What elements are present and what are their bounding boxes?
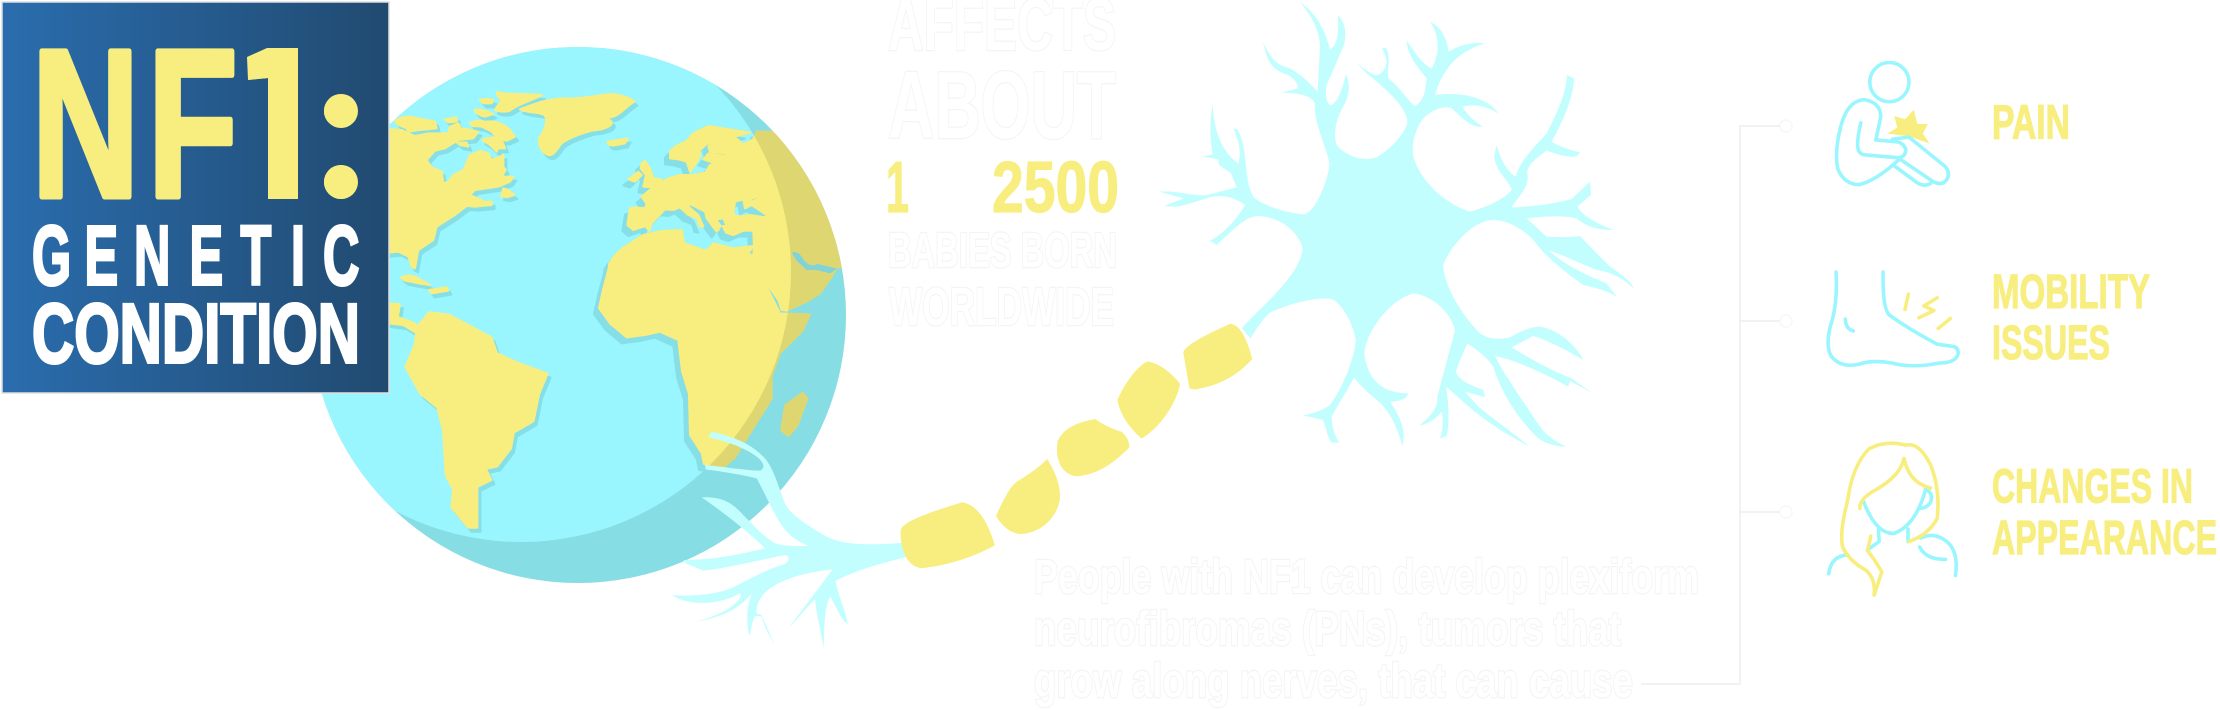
stat line: babies born: BABIES BORN [888, 224, 1117, 278]
title: NF1: : [303, 6, 373, 242]
stat: 1 in 2500: 1 [886, 148, 909, 228]
stat: 1 in 2500 [886, 148, 1119, 228]
connector lines [1641, 120, 1792, 684]
title: NF1 [39, 48, 358, 200]
title panel [2, 2, 389, 393]
axon terminal branches [672, 432, 913, 648]
subtitle: condition: CONDITION [32, 286, 360, 380]
label: pain: PAIN [1992, 96, 2070, 150]
description paragraph: neurofibromas (PNs), tumors that [1034, 603, 1621, 656]
continents [359, 92, 857, 532]
label: mobility issues [1992, 266, 2150, 370]
label: mobility issues: MOBILITY [1992, 266, 2150, 319]
neuron body and dendrites [1159, 2, 1634, 447]
stat: 1 in 2500: IN [923, 148, 978, 228]
subtitle: genetic: GENETIC [32, 208, 359, 303]
globe ocean shadow [310, 47, 846, 583]
stat: 1 in 2500: 2500 [992, 148, 1119, 228]
icon: person in pain [1837, 62, 1948, 185]
icon: injured foot [1828, 272, 1958, 366]
title: NF1: F [148, 6, 238, 242]
label: changes in appearance [1992, 460, 2217, 565]
neuron [901, 2, 1634, 568]
description paragraph: grow along nerves, that can cause [1034, 655, 1633, 708]
title: NF1: 1 [244, 6, 300, 242]
description paragraph: People with NF1 can develop plexiform [1034, 551, 1699, 604]
icon: woman with long hair [1829, 443, 1956, 595]
stat line: worldwide: WORLDWIDE [889, 277, 1114, 337]
globe lit ocean [322, 47, 754, 542]
prevalence statistic text [886, 0, 1119, 337]
globe [322, 47, 846, 583]
myelin sheath segments [901, 324, 1252, 568]
stat line: about: ABOUT [888, 52, 1116, 159]
label: mobility issues: ISSUES [1992, 317, 2110, 370]
title: NF1: N [32, 6, 140, 242]
description paragraph [1034, 551, 1699, 708]
